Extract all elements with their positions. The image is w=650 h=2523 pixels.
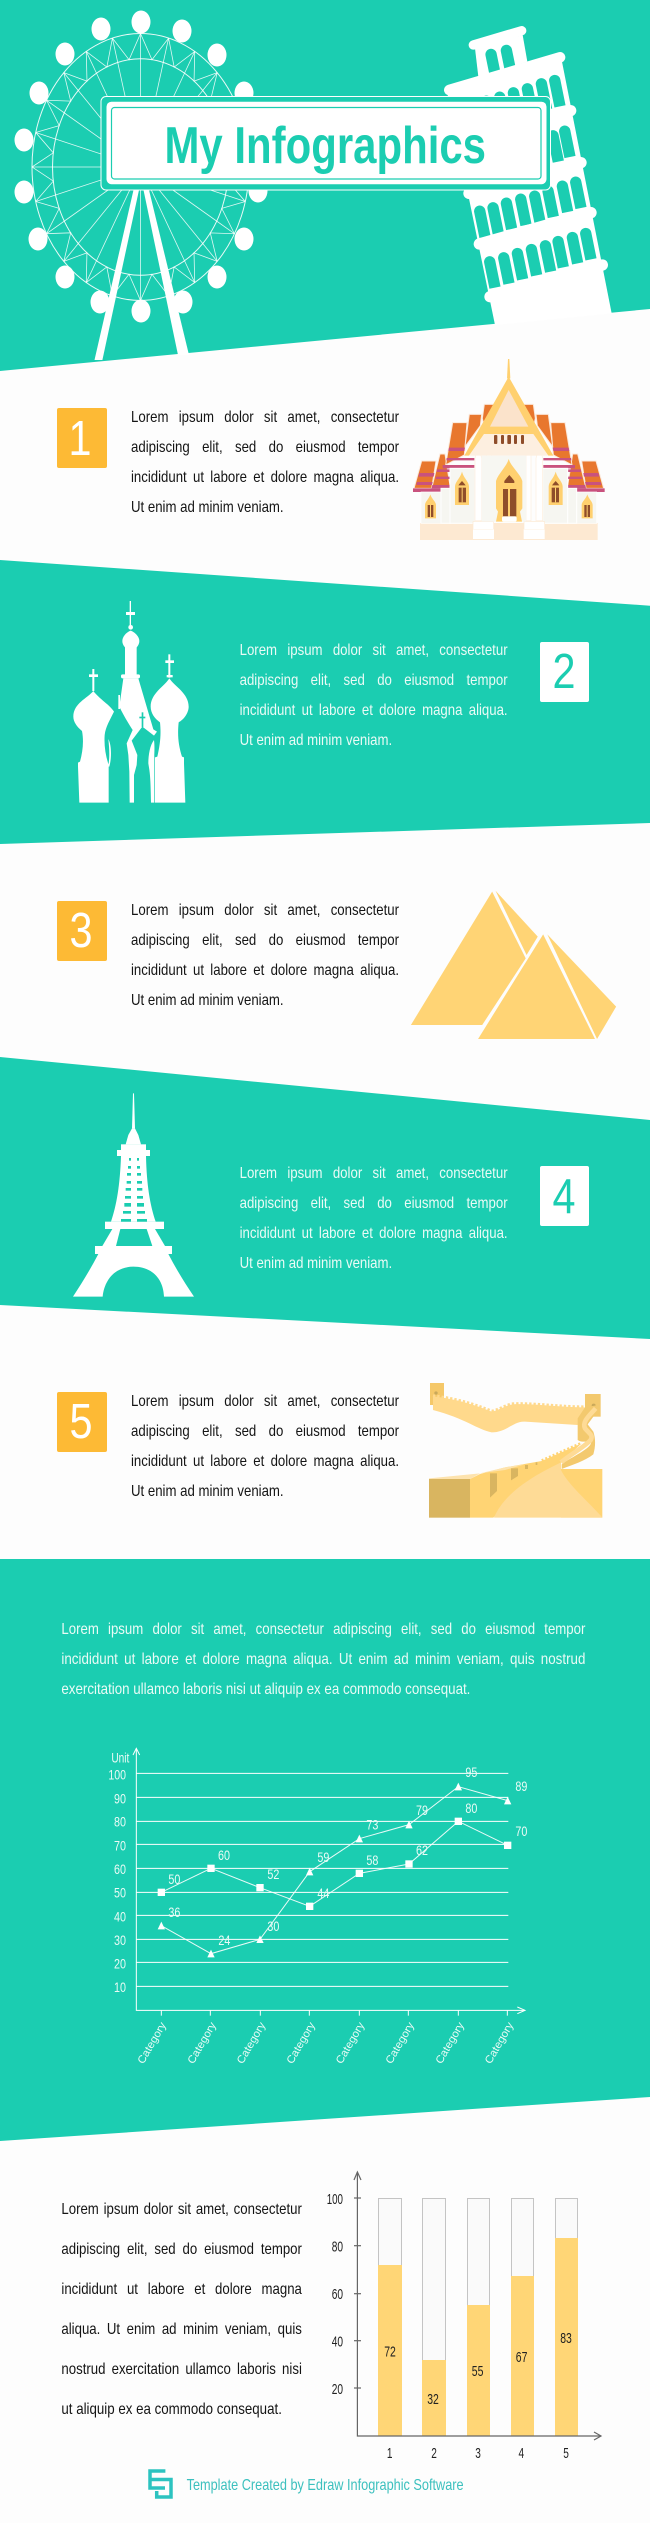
section 2: [0, 560, 650, 844]
x axis category labels: Category: [136, 2020, 169, 2066]
text block 4: Lorem ipsum dolor sit amet, consectetur: [240, 1165, 508, 1182]
text block 3: Lorem ipsum dolor sit amet, consectetur: [131, 902, 400, 919]
series: triangles: 79: [416, 1803, 428, 1818]
series: squares: 70: [515, 1824, 528, 1839]
bar chart: 80: [332, 2239, 343, 2256]
series: triangles: 30: [267, 1919, 280, 1934]
y axis labels: 30: [114, 1933, 126, 1948]
bar chart: 1: [387, 2445, 392, 2462]
y axis labels: 90: [114, 1791, 126, 1806]
bar chart: 83: [560, 2330, 572, 2347]
chart panel: [0, 1559, 650, 2141]
bottom text block: incididunt ut labore et dolore magna: [61, 2281, 302, 2298]
y axis labels: 50: [114, 1886, 126, 1901]
icon: Great Wall: [429, 1383, 602, 1518]
series: squares: 80: [465, 1801, 478, 1816]
text block 1: Lorem ipsum dolor sit amet, consectetur: [131, 409, 400, 426]
number badge 3: [57, 901, 107, 961]
text block 5: incididunt ut labore et dolore magna aliqua.: [131, 1453, 399, 1470]
bottom text block: ut aliquip ex ea commodo consequat.: [61, 2401, 282, 2418]
series: squares: 50: [168, 1872, 181, 1887]
series: squares: 62: [416, 1843, 428, 1858]
title plate: [101, 96, 550, 190]
y axis labels: 40: [114, 1909, 126, 1924]
x axis category labels: Category: [483, 2020, 517, 2066]
title: My Infographics: [164, 117, 486, 175]
section 5: [57, 1383, 602, 1518]
section 1: [57, 359, 605, 540]
text block 1: Ut enim ad minim veniam.: [131, 499, 284, 516]
bar chart: 40: [332, 2334, 343, 2351]
header band: [0, 0, 650, 371]
text block 4: [240, 1165, 508, 1272]
bar chart: 2: [431, 2445, 437, 2462]
series: triangles: 24: [218, 1933, 231, 1948]
bar chart: 60: [332, 2286, 343, 2303]
bar chart: 3: [475, 2445, 481, 2462]
footer logo: [150, 2471, 171, 2497]
number badge 4: 4: [552, 1170, 576, 1224]
number badge 1: [57, 408, 107, 468]
text block 1: adipiscing elit, sed do eiusmod tempor: [131, 439, 400, 456]
y axis labels: 80: [114, 1815, 126, 1830]
bottom text block: Lorem ipsum dolor sit amet, consectetur: [61, 2201, 302, 2218]
bar chart: 5: [563, 2445, 569, 2462]
y axis labels: 70: [114, 1838, 126, 1853]
y axis labels: 20: [114, 1957, 126, 1972]
text block 1: incididunt ut labore et dolore magna aliqua.: [131, 469, 399, 486]
x axis category labels: Category: [334, 2020, 368, 2066]
icon: onion dome cathedral: [73, 601, 189, 803]
bar chart: 4: [518, 2445, 524, 2462]
x axis category labels: Category: [285, 2020, 318, 2066]
text block 2: Lorem ipsum dolor sit amet, consectetur: [240, 642, 508, 659]
band 4: [0, 1057, 650, 1339]
y axis labels: 60: [114, 1862, 126, 1877]
x axis category labels: [136, 2020, 517, 2066]
text block 3: [131, 902, 400, 1009]
text block 2: incididunt ut labore et dolore magna aliqua.: [240, 702, 508, 719]
bottom panel: [61, 2172, 601, 2497]
x axis category labels: Category: [434, 2020, 467, 2066]
series: triangles: [158, 1765, 527, 1957]
series: triangles: 59: [317, 1850, 329, 1865]
text block 4: adipiscing elit, sed do eiusmod tempor: [240, 1195, 508, 1212]
number badge 4: [540, 1166, 589, 1226]
text block 5: Ut enim ad minim veniam.: [131, 1483, 284, 1500]
text block 2: adipiscing elit, sed do eiusmod tempor: [240, 672, 508, 689]
text block 1: [131, 409, 400, 516]
number badge 5: [57, 1392, 107, 1452]
number badge 2: [540, 642, 589, 702]
icon: pyramids: [411, 891, 616, 1039]
bar chart: 67: [516, 2349, 527, 2366]
y axis labels: Unit: [111, 1751, 129, 1766]
band 2: [0, 560, 650, 844]
y axis labels: [108, 1751, 129, 1995]
y axis labels: 100: [108, 1767, 126, 1782]
x axis category labels: Category: [186, 2020, 219, 2066]
series: triangles: 95: [465, 1765, 478, 1780]
bar chart: 72: [384, 2344, 396, 2361]
text block 5: [131, 1393, 400, 1500]
icon: Thai temple: [413, 359, 605, 540]
bottom text block: nostrud exercitation ullamco laboris nisi: [61, 2361, 302, 2378]
x axis category labels: Category: [384, 2020, 417, 2066]
bar chart: 100: [327, 2191, 343, 2208]
text block 2: [240, 642, 508, 749]
section 4: [0, 1057, 650, 1339]
text block 2: Ut enim ad minim veniam.: [240, 732, 392, 749]
bar chart: 20: [332, 2381, 343, 2398]
bottom text block: adipiscing elit, sed do eiusmod tempor: [61, 2241, 302, 2258]
series: squares: [158, 1801, 528, 1910]
y axis labels: 10: [114, 1980, 126, 1995]
chart intro text: [61, 1621, 586, 1698]
text block 3: adipiscing elit, sed do eiusmod tempor: [131, 932, 400, 949]
bar chart: 32: [427, 2391, 439, 2408]
icon: Eiffel tower: [73, 1093, 194, 1297]
series: triangles: 36: [168, 1905, 180, 1920]
bottom text block: [61, 2201, 302, 2418]
series: squares: 60: [218, 1848, 230, 1863]
series: squares: 44: [317, 1886, 330, 1901]
series: triangles: 73: [366, 1817, 378, 1832]
chart intro text: exercitation ullamco laboris nisi ut aliquip ex ea commodo consequat.: [61, 1681, 470, 1698]
text block 5: Lorem ipsum dolor sit amet, consectetur: [131, 1393, 400, 1410]
text block 5: adipiscing elit, sed do eiusmod tempor: [131, 1423, 400, 1440]
text block 3: Ut enim ad minim veniam.: [131, 992, 284, 1009]
section 3: [57, 891, 616, 1039]
x axis category labels: Category: [235, 2020, 269, 2066]
series: triangles: 89: [515, 1779, 527, 1794]
text block 3: incididunt ut labore et dolore magna aliqua.: [131, 962, 399, 979]
text block 4: Ut enim ad minim veniam.: [240, 1255, 392, 1272]
number badge 5: 5: [70, 1395, 92, 1449]
chart band: [0, 1559, 650, 2141]
bar chart: [327, 2172, 601, 2462]
number badge 1: 1: [68, 412, 92, 466]
number badge 3: 3: [70, 904, 92, 958]
icon: leaning tower of Pisa: [447, 31, 612, 325]
bar chart: 55: [472, 2363, 483, 2380]
text block 4: incididunt ut labore et dolore magna aliqua.: [240, 1225, 508, 1242]
icon: ferris wheel: [14, 10, 268, 360]
number badge 2: 2: [552, 645, 576, 699]
series: squares: 58: [366, 1853, 378, 1868]
line chart: [108, 1748, 528, 2066]
bottom text block: aliqua. Ut enim ad minim veniam, quis: [61, 2321, 302, 2338]
header panel: [0, 0, 650, 371]
footer credit: Template Created by Edraw Infographic Software: [187, 2477, 464, 2494]
series: squares: 52: [267, 1867, 279, 1882]
